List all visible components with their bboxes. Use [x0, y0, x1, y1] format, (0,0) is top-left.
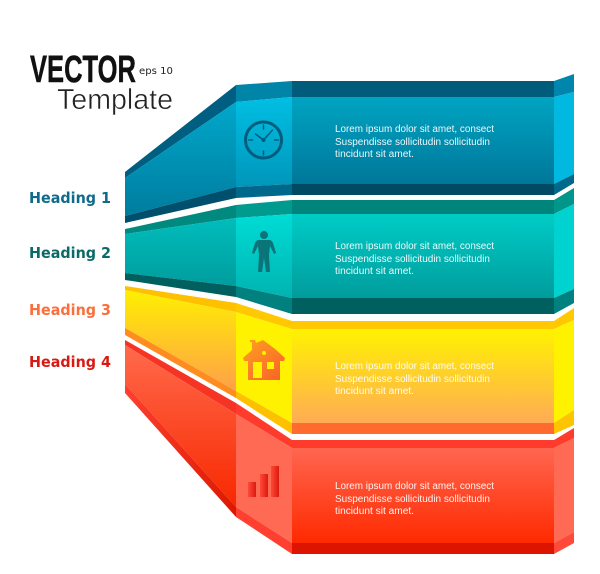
- title: VECTOR eps 10 Template: VECTOR: [30, 49, 136, 91]
- icon: clock: [246, 122, 282, 158]
- icon: person: [252, 231, 276, 272]
- body text 1: tincidunt sit amet.: [335, 149, 414, 160]
- body text 3: Suspendisse sollicitudin sollicitudin: [335, 374, 490, 385]
- panel: blue band 1: [125, 74, 574, 223]
- body text 2: tincidunt sit amet.: [335, 266, 414, 277]
- panel: yellow band 3: [125, 286, 574, 434]
- body text 2: Lorem ipsum dolor sit amet, consect: [335, 241, 494, 252]
- body text 4: Suspendisse sollicitudin sollicitudin: [335, 494, 490, 505]
- heading 3: Heading 3: [29, 301, 111, 319]
- title: VECTOR eps 10 Template: eps 10: [139, 66, 173, 77]
- body text 2: Suspendisse sollicitudin sollicitudin: [335, 254, 490, 265]
- body text 1: Lorem ipsum dolor sit amet, consect: [335, 124, 494, 135]
- body text 1: Suspendisse sollicitudin sollicitudin: [335, 137, 490, 148]
- panel: red band 4: [125, 340, 574, 554]
- title: VECTOR eps 10 Template: Template: [57, 84, 173, 116]
- title: VECTOR eps 10 Template: [30, 49, 173, 116]
- panel: teal band 2: [125, 188, 574, 314]
- icon: bar chart: [248, 466, 279, 497]
- body text 4: tincidunt sit amet.: [335, 506, 414, 517]
- heading 2: Heading 2: [29, 244, 111, 262]
- body text 4: Lorem ipsum dolor sit amet, consect: [335, 481, 494, 492]
- body text 3: Lorem ipsum dolor sit amet, consect: [335, 361, 494, 372]
- heading 1: Heading 1: [29, 189, 111, 207]
- icon: house: [243, 340, 285, 380]
- heading 4: Heading 4: [29, 353, 111, 371]
- body text 3: tincidunt sit amet.: [335, 386, 414, 397]
